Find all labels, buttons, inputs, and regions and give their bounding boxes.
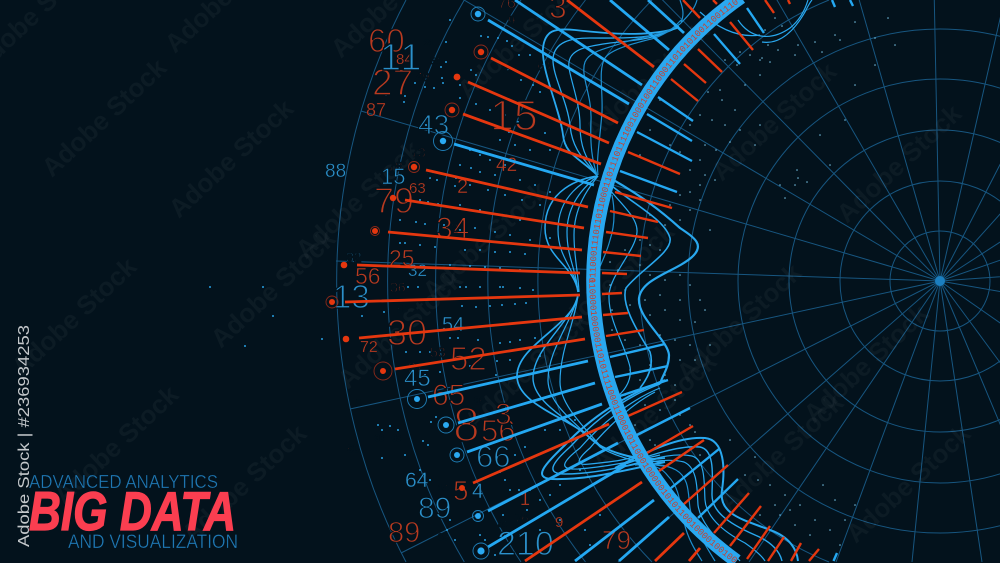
number labels, red: 3 <box>495 398 512 431</box>
outer blue bars <box>428 0 684 561</box>
number labels, blue: 43 <box>418 109 449 140</box>
number labels, red: 27 <box>408 359 424 375</box>
number labels, red: 78 <box>388 159 402 174</box>
number labels, red: 27 <box>372 62 413 103</box>
number labels, blue: 66 <box>426 169 438 180</box>
data point markers <box>326 7 489 559</box>
binary data ring: 1100001000001101011110001100010110001000001010110010000100100011 <box>589 278 737 562</box>
watermarks: Adobe Stock <box>163 93 300 224</box>
number labels, red: 25 <box>389 245 415 271</box>
number labels, blue: 55 <box>484 443 492 450</box>
number labels, red: 87 <box>366 100 386 120</box>
number labels, red: 73 <box>411 145 425 160</box>
number labels, blue: 11 <box>380 37 423 79</box>
inner red bars <box>602 0 819 561</box>
watermarks: Adobe Stock <box>205 223 342 354</box>
number labels, red: 14 <box>438 483 448 493</box>
binary data ring: 011000111011011000110111011110010001001100011010101001100111011001 <box>589 0 738 282</box>
number labels, red: 72 <box>360 339 378 356</box>
watermarks: Adobe Stock <box>6 251 143 382</box>
radial polar grid <box>336 0 1000 562</box>
binary data ring <box>586 0 745 563</box>
number labels, blue: 13 <box>333 278 370 315</box>
number labels, blue: 32 <box>346 249 362 265</box>
number labels, red: 43 <box>411 480 421 490</box>
subtitle bottom: AND VISUALIZATION <box>68 532 238 553</box>
number labels, red: 60 <box>347 443 359 455</box>
watermarks: Adobe Stock <box>586 346 723 477</box>
number labels, red: 76 <box>515 511 529 525</box>
number labels, red: 9 <box>508 13 515 28</box>
watermarks: Adobe Stock <box>176 418 313 549</box>
number labels, red: 5 <box>453 475 469 506</box>
subtitle top: ADVANCED ANALYTICS <box>29 471 218 492</box>
number labels, red: 63 <box>537 59 551 73</box>
number labels, blue: 89 <box>418 492 451 525</box>
upper right lobe <box>598 178 698 396</box>
top right trace <box>700 0 812 42</box>
number labels, red: 8 <box>453 399 480 452</box>
middle left lobe <box>545 176 598 292</box>
watermarks: Adobe Stock <box>706 56 843 187</box>
number labels, red: 63 <box>392 434 401 443</box>
watermarks: Adobe Stock <box>290 134 427 265</box>
watermarks: Adobe Stock <box>36 52 173 183</box>
title block <box>29 471 238 553</box>
watermarks: Adobe Stock <box>713 387 850 518</box>
blue markers <box>408 7 489 559</box>
watermarks: Adobe Stock <box>840 418 977 549</box>
wavy data lines <box>517 0 812 561</box>
red markers <box>326 45 488 491</box>
watermarks: Adobe Stock <box>459 305 596 436</box>
number labels, blue: 54 <box>430 56 440 66</box>
number labels, red: 42 <box>496 155 517 176</box>
number labels, red: 56 <box>355 263 381 289</box>
number labels, red: 2 <box>457 176 468 198</box>
inner blue bars <box>610 0 853 561</box>
number labels, red: 86 <box>474 396 486 407</box>
number labels, red: 79 <box>602 525 631 555</box>
number labels, blue: 54 <box>442 314 464 336</box>
watermarks: Adobe Stock <box>417 175 554 306</box>
number labels, red: 63 <box>409 180 426 197</box>
watermarks: Adobe Stock <box>671 257 808 388</box>
number labels, red <box>347 0 631 555</box>
number labels, red: 30 <box>387 312 427 353</box>
number labels, red: 8 <box>356 398 361 408</box>
number labels, blue: 64 <box>405 469 429 492</box>
outer red bars <box>345 0 700 561</box>
main heading: BIG DATA <box>29 480 236 542</box>
number labels, blue: 88 <box>325 161 346 182</box>
number labels, blue <box>325 37 554 563</box>
lower left lobe <box>517 295 665 466</box>
watermarks: Adobe Stock <box>48 379 185 510</box>
watermarks: Adobe Stock <box>579 15 716 146</box>
number labels, blue: 210 <box>497 525 554 563</box>
stock id vertical text: Adobe Stock | #236934253 <box>16 325 33 547</box>
number labels, red: 89 <box>388 517 420 549</box>
number labels, red: 15 <box>490 92 538 140</box>
watermarks: Adobe Stock <box>332 264 469 395</box>
upper left lobe <box>543 0 697 175</box>
number labels, blue: 38 <box>503 65 513 75</box>
number labels, red: 65 <box>432 379 465 412</box>
bottom left lobe <box>542 380 665 479</box>
lower right lobe <box>615 438 798 561</box>
number labels, red: 1 <box>520 489 530 509</box>
watermarks: Adobe Stock <box>798 298 935 429</box>
number labels, blue: 15 <box>381 164 405 189</box>
number labels, red: 60 <box>368 22 405 59</box>
number labels, red: 36 <box>390 279 406 295</box>
number labels, red: 49 <box>416 70 430 84</box>
watermarks: Adobe Stock <box>831 98 968 229</box>
number labels, red: 21 <box>424 38 434 48</box>
watermarks: Adobe Stock <box>544 216 681 347</box>
number labels, red: 53 <box>430 344 446 360</box>
number labels, blue: 65 <box>397 304 409 315</box>
scattered data dots <box>210 18 895 555</box>
number labels, blue: 4 <box>472 480 484 503</box>
number labels, red: 79 <box>374 180 414 221</box>
number labels, blue: 45 <box>404 365 431 392</box>
number labels, red: 38 <box>375 434 384 443</box>
number labels, red: 9 <box>555 514 563 531</box>
number labels, red: 52 <box>450 340 487 377</box>
number labels, blue: 84 <box>498 520 507 529</box>
number labels, red: 34 <box>436 212 469 245</box>
number labels, red: 56 <box>481 413 515 448</box>
number labels, red: 84 <box>396 51 413 68</box>
number labels, blue: 89 <box>438 532 448 542</box>
number labels, blue: 66 <box>476 439 510 474</box>
number labels, blue: 32 <box>408 261 427 280</box>
number labels, red: 2 <box>451 221 458 235</box>
